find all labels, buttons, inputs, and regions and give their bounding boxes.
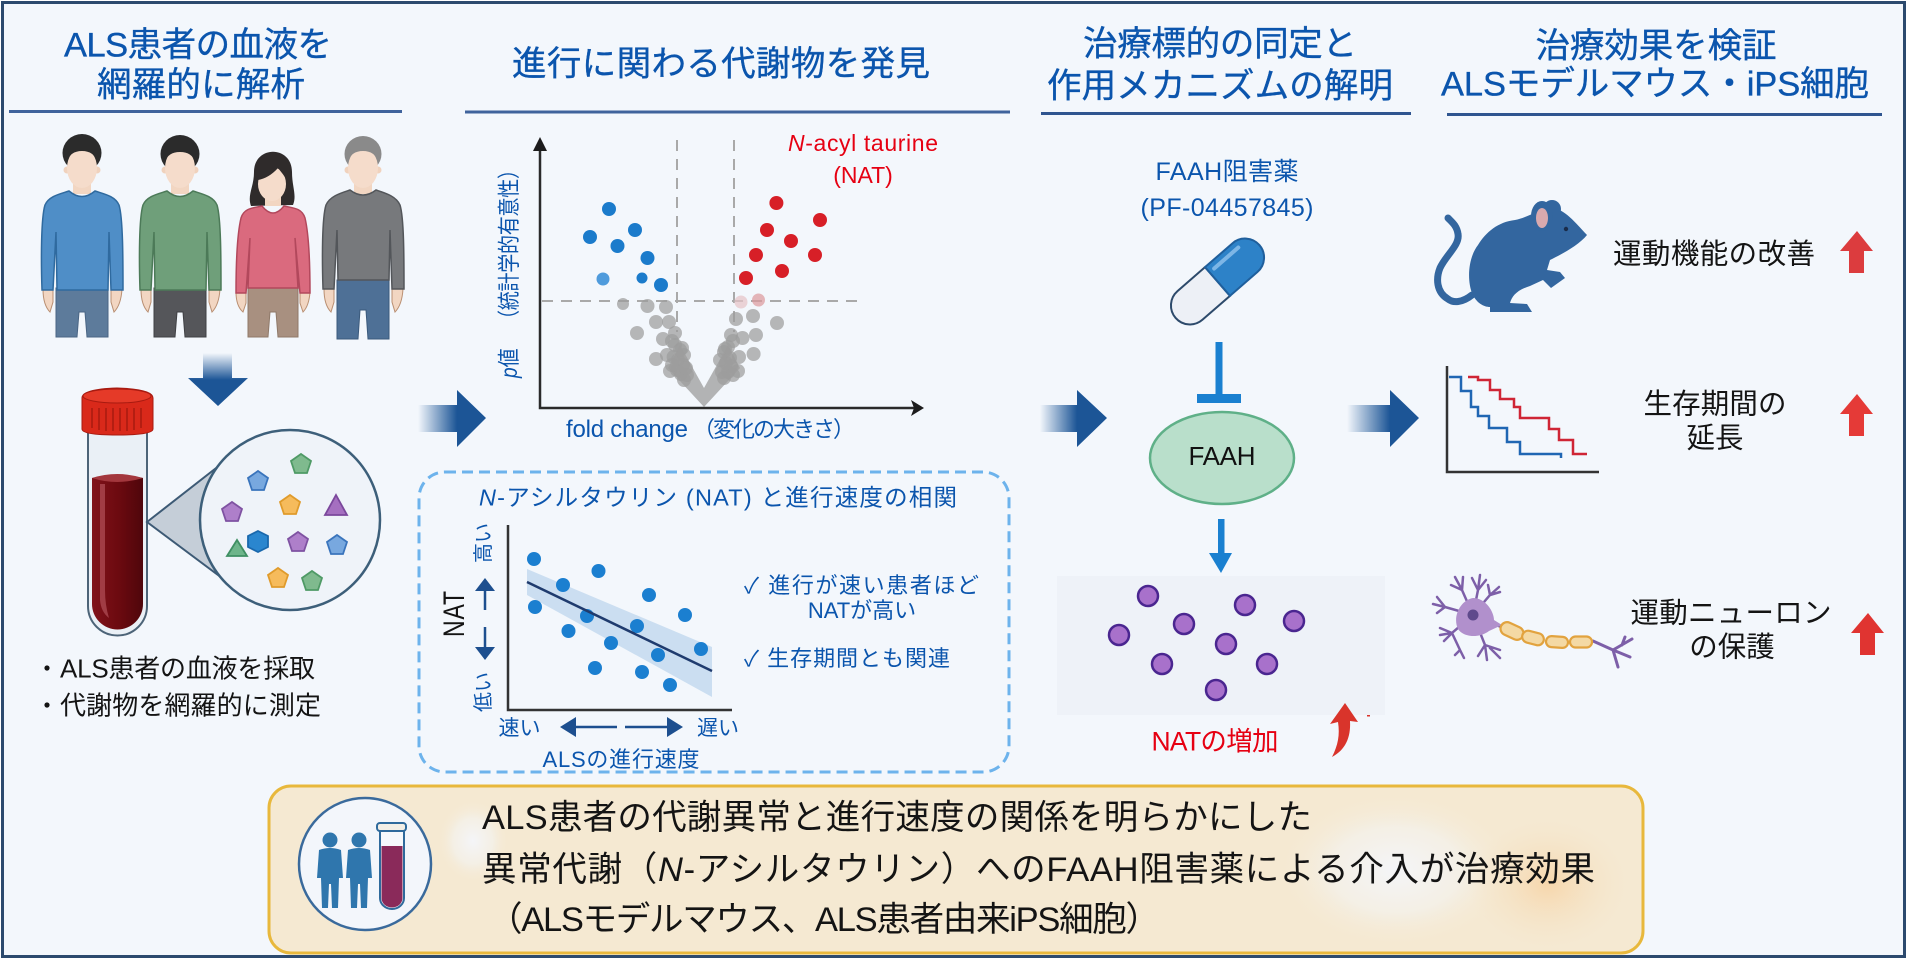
text: findings: ✓ 生存期間とも関連	[744, 646, 950, 671]
callout: N-acyl taurine: (NAT)	[833, 162, 893, 188]
chart: survival curves	[1447, 366, 1599, 472]
axis label: slow: 遅い	[697, 717, 739, 740]
icon: metabolite shapes	[222, 454, 347, 590]
node: FAAH enzyme	[1150, 412, 1294, 504]
text: conclusion: （ALSモデルマウス、ALS患者由来iPS細胞）	[488, 901, 1160, 939]
heading: column 1: ALS患者の血液を	[64, 26, 332, 64]
text: method bullets: ALS患者の血液を採取	[60, 654, 315, 684]
callout: N-acyl taurine: N-acyl taurine	[788, 130, 938, 156]
axis label: low: 低い	[472, 672, 495, 712]
icon: patient in pink sweater	[236, 152, 310, 337]
icon: red up arrow survival	[1840, 394, 1873, 436]
icon: motor neuron	[1433, 575, 1632, 667]
axis label: fast: 速い	[498, 717, 540, 740]
axis label: p value: p値	[497, 348, 522, 379]
text: motor neuron protection	[1630, 598, 1832, 664]
axis label: high: 高い	[472, 523, 495, 563]
icon: red up arrow motor	[1840, 231, 1873, 273]
axis label: fold change: （変化の大きさ）	[693, 417, 855, 442]
icon: patient in grey sweater	[322, 136, 404, 339]
axis label: fold change: fold change	[566, 416, 688, 443]
arrows: NAT axis	[475, 578, 495, 660]
text: NAT increase: NATの増加	[1152, 726, 1278, 756]
text: conclusion: 異常代謝（N-アシルタウリン）へのFAAH阻害薬による介入が治療効果	[482, 851, 1595, 889]
arrow: FAAH to NAT	[1209, 519, 1232, 573]
heading: column 1: 網羅的に解析	[97, 66, 305, 104]
heading: column 4: ALSモデルマウス・iPS細胞	[1441, 66, 1869, 104]
icon: red up arrow neuron	[1851, 613, 1884, 655]
icon: patients and tube	[299, 798, 431, 930]
text: survival extended	[1644, 388, 1786, 454]
icon: patients group	[41, 134, 404, 339]
axes	[533, 137, 924, 416]
heading: column 4: 治療効果を検証	[1536, 28, 1776, 66]
grey non-significant points	[617, 294, 784, 407]
chart: scatter plot with regression	[508, 525, 732, 710]
text: motor function improved: 運動機能の改善	[1613, 238, 1815, 270]
arrows: speed axis	[560, 717, 683, 737]
icon: blood tube with magnifier	[82, 388, 380, 636]
heading: column 2	[465, 46, 1010, 114]
blue significant points	[583, 202, 668, 292]
text: findings	[744, 573, 979, 671]
text: FAAH inhibitor label: FAAH阻害薬	[1156, 158, 1298, 186]
heading: column 4	[1441, 28, 1882, 116]
icon: inhibition bar	[1197, 342, 1241, 403]
axis label: NAT: NAT	[437, 591, 471, 637]
heading: column 3	[1041, 26, 1411, 115]
dashed threshold lines	[542, 140, 865, 332]
arrow: down from patients to blood tube	[188, 353, 248, 406]
text: findings: ✓ 進行が速い患者ほど	[744, 573, 979, 598]
text: method bullets: 代謝物を網羅的に測定	[60, 690, 321, 720]
text: survival extended: 延長	[1686, 422, 1744, 454]
heading: column 3: 治療標的の同定と	[1083, 26, 1357, 64]
icon: red curved up arrow	[1330, 703, 1370, 757]
panel title: N-アシルタウリン (NAT) と進行速度の相関	[479, 484, 957, 510]
text: FAAH inhibitor label: (PF-04457845)	[1140, 194, 1314, 222]
panel: conclusion	[269, 786, 1643, 953]
icon: patient in blue sweater	[41, 134, 123, 337]
panel: NAT correlation	[419, 472, 1009, 772]
text: method bullets	[44, 654, 321, 720]
icon: mouse	[1438, 200, 1587, 312]
heading: column 2: 進行に関わる代謝物を発見	[512, 46, 930, 84]
callout: N-acyl taurine	[788, 130, 938, 188]
axis label: p value: （統計学的有意性）	[497, 160, 522, 329]
arrow: column 1 to column 2	[418, 390, 486, 447]
icon: patient in green sweater	[139, 135, 221, 337]
chart: volcano plot	[497, 130, 938, 443]
node: FAAH enzyme: FAAH	[1188, 441, 1256, 471]
text: findings: NATが高い	[808, 598, 916, 623]
text: FAAH inhibitor label	[1140, 158, 1314, 222]
heading: column 1	[9, 26, 402, 113]
icon: capsule	[1163, 231, 1272, 332]
icon: tube	[82, 388, 153, 636]
panel: NAT molecules	[1057, 576, 1385, 715]
arrow: column 3 to column 4	[1347, 390, 1419, 447]
icon: magnifier wedge and circle	[147, 430, 380, 610]
axis label: fold change	[566, 416, 855, 443]
text: conclusion: ALS患者の代謝異常と進行速度の関係を明らかにした	[482, 799, 1312, 837]
red significant points	[739, 196, 827, 285]
text: conclusion	[482, 799, 1595, 939]
text: motor neuron protection: 運動ニューロン	[1630, 598, 1832, 630]
axis label: progression speed: ALSの進行速度	[542, 747, 700, 772]
text: survival extended: 生存期間の	[1644, 388, 1786, 420]
arrow: column 2 to column 3	[1040, 390, 1107, 447]
text: motor neuron protection: の保護	[1689, 632, 1775, 664]
heading: column 3: 作用メカニズムの解明	[1047, 68, 1393, 106]
